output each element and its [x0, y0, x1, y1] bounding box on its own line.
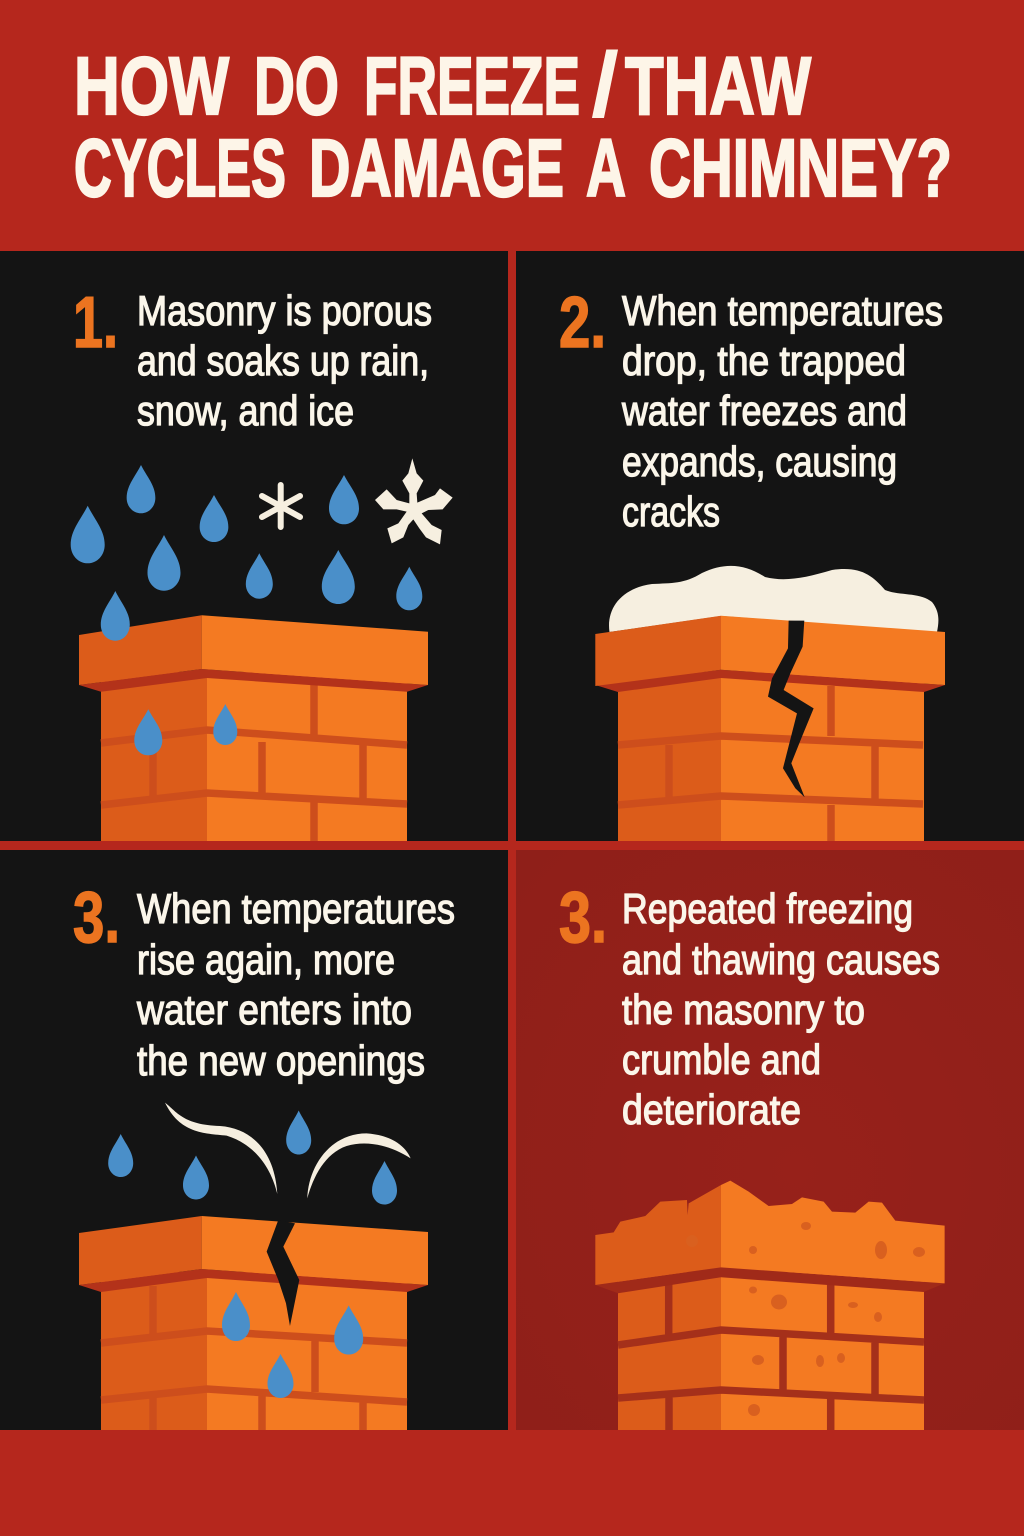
text: step 3: rise again, more: [137, 936, 395, 983]
text: step 2: [621, 287, 943, 535]
icon: left swoosh: [165, 1103, 277, 1194]
text: step 2: drop, the trapped: [622, 337, 906, 384]
chimney 1: [79, 615, 428, 841]
icon: small snowflake: [262, 485, 300, 527]
step number 2: 2.: [559, 283, 606, 363]
text: step 2: When temperatures: [622, 287, 943, 334]
icon: large snowflake: [375, 458, 453, 544]
title: /: [591, 34, 619, 136]
title: A: [586, 123, 626, 214]
title: CYCLES: [74, 123, 286, 214]
text: step 4: deteriorate: [622, 1086, 801, 1133]
text: step 4: crumble and: [622, 1036, 821, 1083]
text: step 2: water freezes and: [621, 387, 907, 434]
step number 3: 3.: [73, 878, 120, 958]
title: THAW: [625, 41, 811, 132]
title: DO: [254, 41, 339, 132]
text: step 4: and thawing causes: [622, 936, 940, 983]
text: step 1: [137, 287, 432, 434]
crack: [768, 621, 814, 797]
icon: water drops: [108, 1110, 397, 1398]
text: step 4: the masonry to: [622, 986, 865, 1033]
text: step 2: expands, causing: [622, 438, 897, 485]
panel: step 4 crumbling: [516, 850, 1024, 1430]
chimney 4 crumbling: [595, 1181, 945, 1430]
text: step 4: [622, 885, 940, 1133]
chimney 3: [79, 1216, 428, 1430]
text: step 3: When temperatures: [137, 885, 455, 932]
icon: rain drops: [71, 465, 422, 755]
panel: step 3 thawing: [0, 850, 508, 1430]
panel: step 1 porous masonry: [0, 251, 508, 841]
text: step 3: the new openings: [137, 1037, 425, 1084]
snow cap: [609, 566, 938, 632]
panel: step 2 freezing: [516, 251, 1024, 841]
text: step 1: snow, and ice: [137, 387, 354, 434]
text: step 3: water enters into: [136, 986, 412, 1033]
title: FREEZE: [364, 41, 580, 132]
step number 1: 1.: [73, 283, 118, 363]
chimney 2: [595, 616, 945, 841]
text: step 3: [136, 885, 455, 1084]
title: HOW: [74, 41, 229, 132]
masonry pitting: [686, 1222, 925, 1416]
text: step 2: cracks: [622, 488, 720, 535]
text: step 1: Masonry is porous: [137, 287, 432, 334]
text: step 1: and soaks up rain,: [137, 337, 429, 384]
text: step 4: Repeated freezing: [622, 885, 913, 932]
title: [74, 34, 952, 214]
icon: right swoosh: [307, 1133, 411, 1198]
crack: [267, 1220, 299, 1326]
step number 3 (second): 3.: [559, 878, 607, 958]
title: DAMAGE: [309, 123, 564, 214]
